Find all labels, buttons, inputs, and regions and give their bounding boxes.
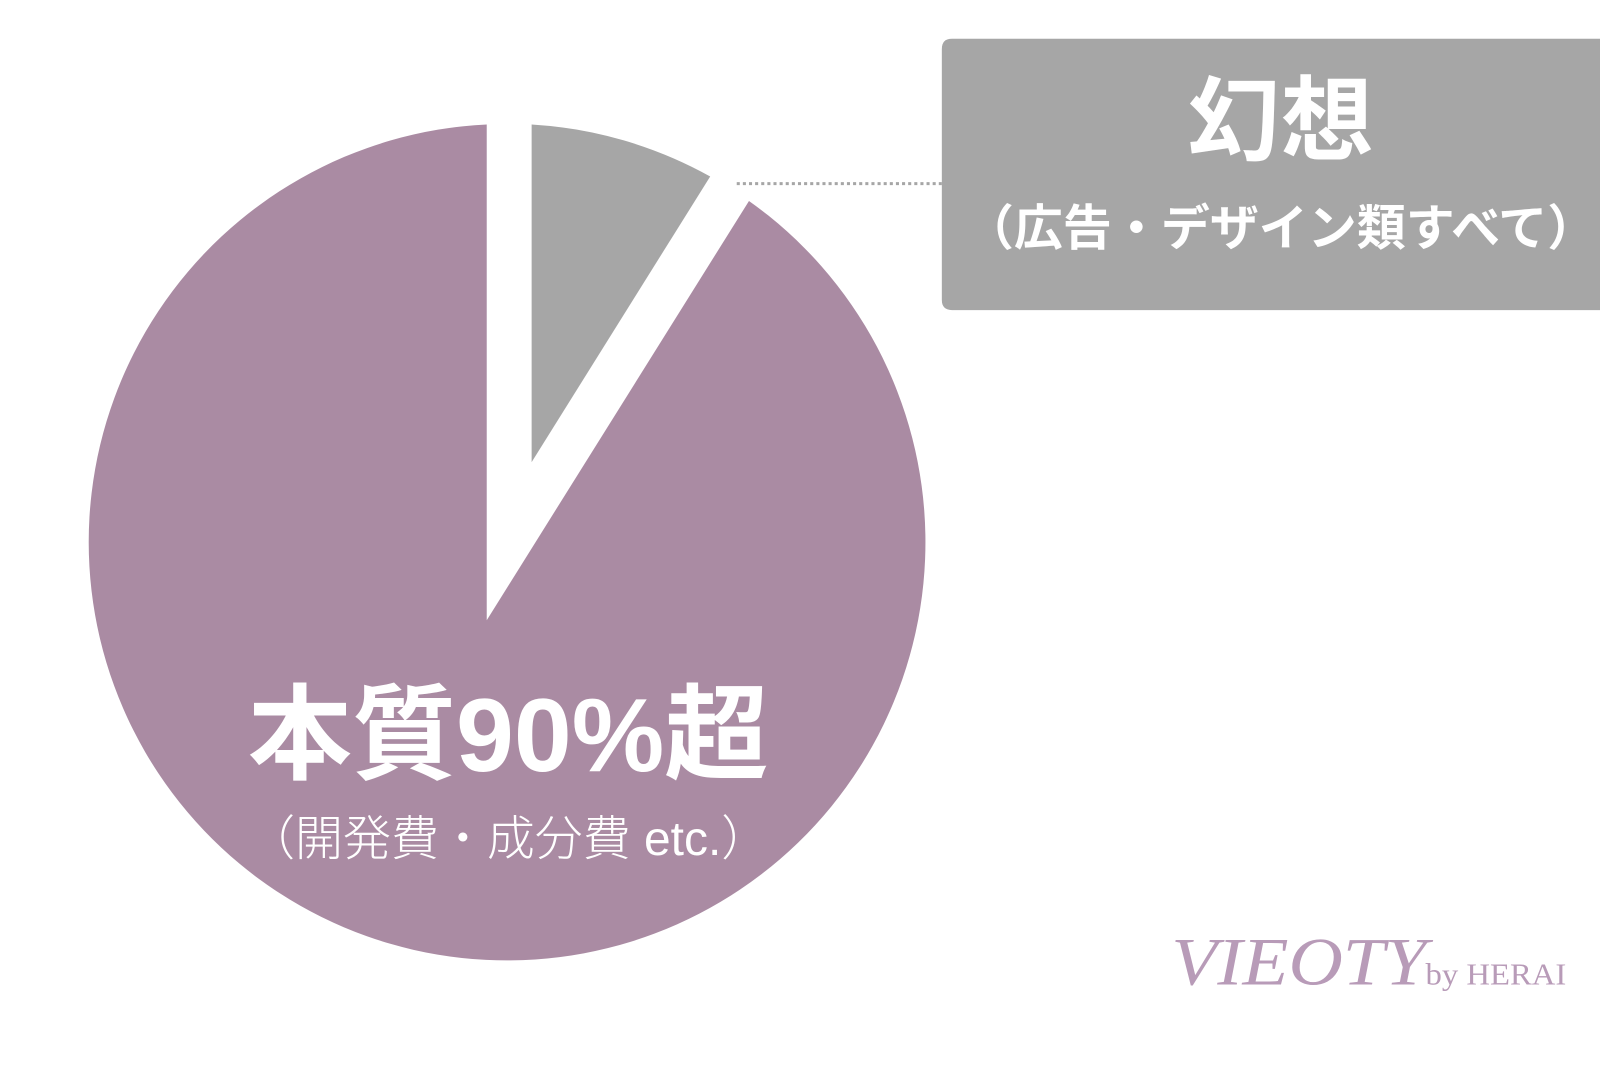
heading: 幻想: 幻想	[1188, 69, 1373, 173]
label: essence 90%+	[247, 678, 769, 866]
logo: VIEOTY by HERAI: VIEOTY	[1171, 924, 1434, 999]
callout box: illusion	[942, 39, 1600, 310]
logo: VIEOTY by HERAI	[1171, 924, 1566, 999]
logo: VIEOTY by HERAI: by HERAI	[1426, 957, 1566, 991]
label: essence 90%+: 本質90%超	[248, 678, 768, 794]
slice: essence (purple)	[89, 124, 925, 960]
connector dotted line	[737, 182, 942, 185]
slice: illusion (gray)	[532, 124, 710, 462]
subtext: development costs: （開発費・成分費 etc.）	[247, 813, 769, 866]
pie chart	[89, 124, 925, 960]
subtext: ads & design: （広告・デザイン類すべて）	[965, 202, 1596, 256]
